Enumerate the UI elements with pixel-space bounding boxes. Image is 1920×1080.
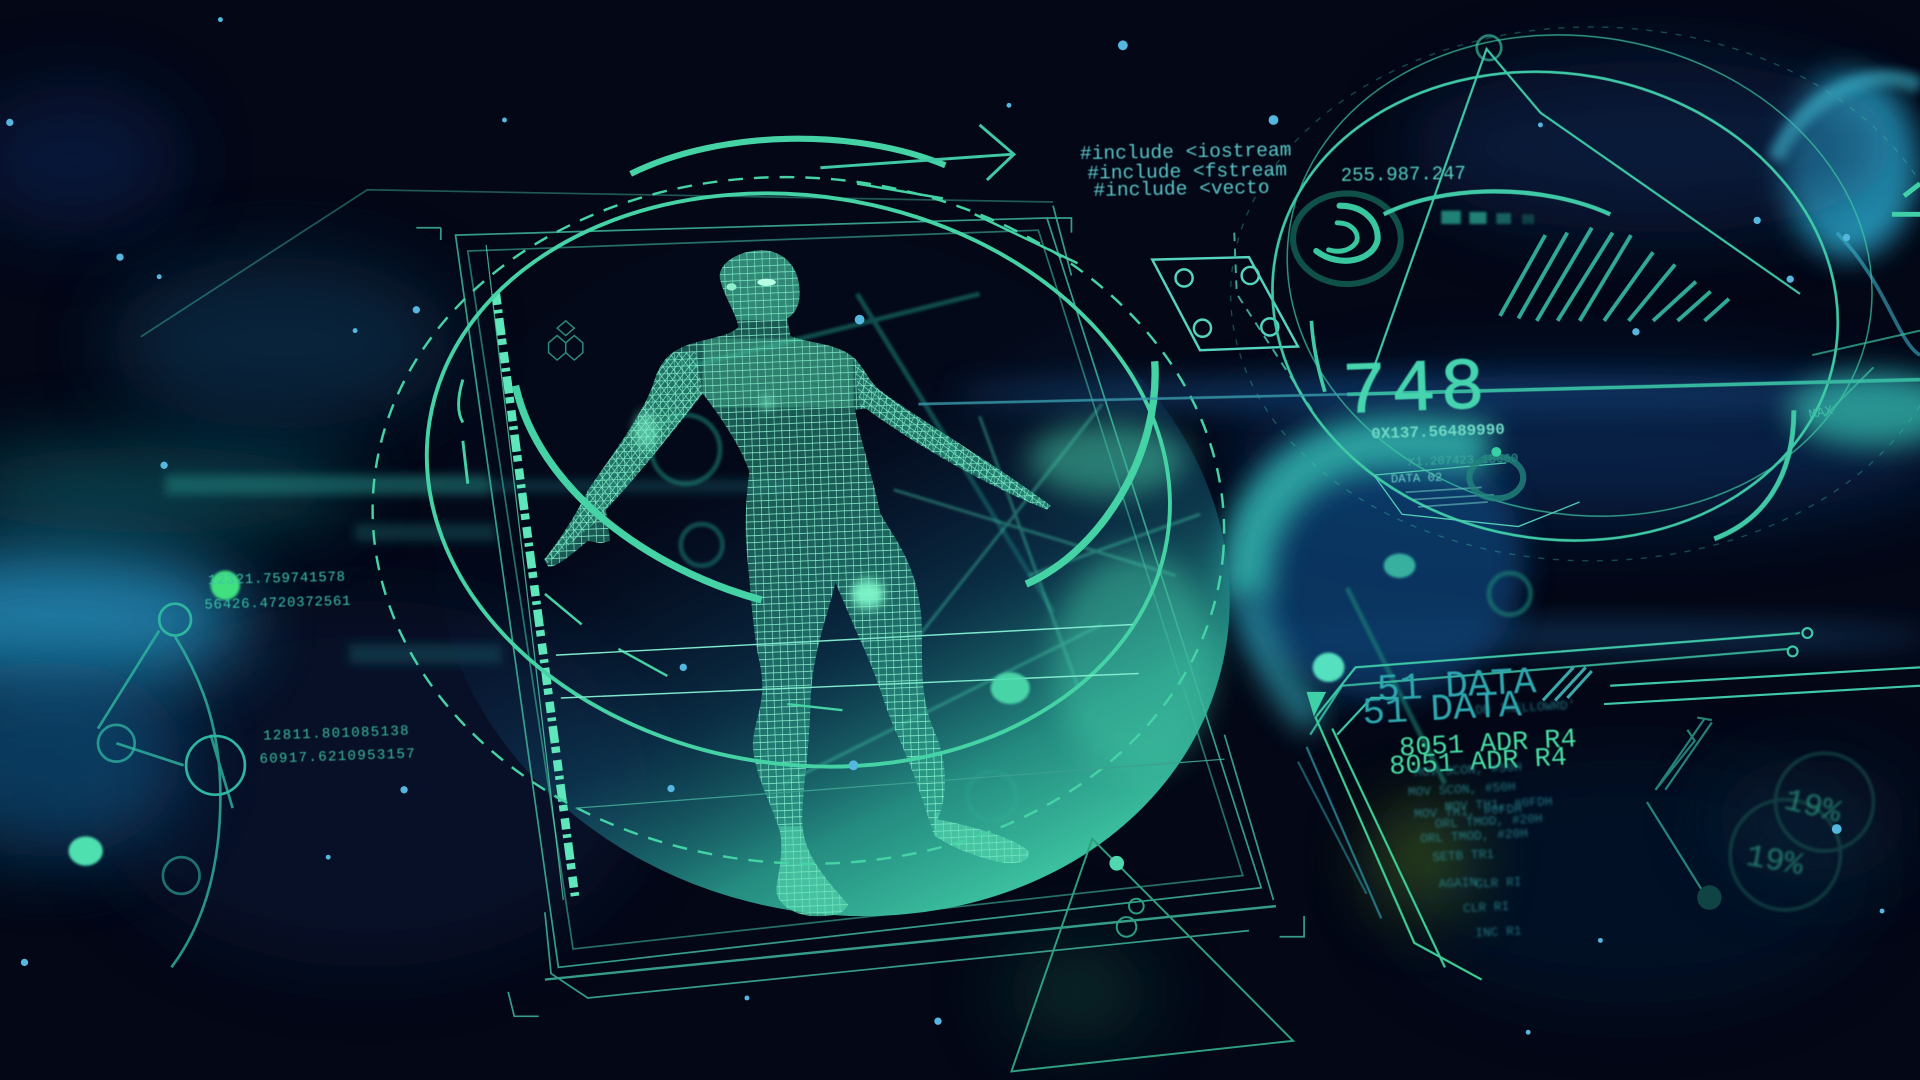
console code: CLR RI <box>1463 899 1510 916</box>
swirl on far right <box>1776 78 1920 416</box>
left numeric text upper: 12321.759741578 <box>208 569 346 589</box>
data readout panel: X1.207423.18660 <box>1408 451 1518 469</box>
left vertical data strip <box>486 245 576 900</box>
left numeric text lower: 60917.6210953157 <box>259 746 416 768</box>
data readout panel <box>1371 421 1580 527</box>
console code: ORL TMOD, #20H <box>1435 811 1543 832</box>
left numeric text lower <box>259 723 416 768</box>
big number: 748 <box>1341 348 1491 436</box>
blurred second globe <box>1231 429 1524 722</box>
dim horizontal haze bars <box>165 475 796 664</box>
code text: #include <fstream <box>1087 159 1287 185</box>
warning triangle <box>1307 692 1326 716</box>
dashed vertical <box>1234 233 1316 416</box>
left numeric text lower: 12811.801085138 <box>263 723 410 745</box>
top arrow <box>820 125 1014 180</box>
left network diagram <box>98 604 245 967</box>
console code: SETB TR1 <box>1432 847 1495 865</box>
zigzag arrow <box>1647 718 1722 910</box>
console code: DB 'HELLOWRD' <box>1475 698 1576 718</box>
background circuit haze <box>651 294 1531 820</box>
right radar rings <box>918 0 1920 585</box>
console code: CLR RI <box>1475 874 1522 892</box>
console address lines: 8051 ADR R4 <box>1389 744 1568 783</box>
left numeric text upper: 56426.4720372561 <box>204 594 352 614</box>
right-edge label: MAX <box>1808 404 1835 424</box>
console code: MOV SCON, #50H <box>1414 760 1522 780</box>
progress dashes <box>1441 211 1534 224</box>
dome hemisphere <box>362 147 1303 999</box>
console code: MOV TH1, #0FDH <box>1414 801 1522 822</box>
lower-right console <box>1298 628 1920 980</box>
code text: #include <vecto <box>1093 177 1270 202</box>
swirl icon <box>1293 193 1401 284</box>
console headings: 51 DATA <box>1361 684 1523 736</box>
bottom triangle with nodes <box>1011 839 1293 1071</box>
console code: AGAIN: <box>1438 874 1485 892</box>
glowing nodes <box>69 553 1416 866</box>
console code <box>1408 698 1576 941</box>
console code: MOV TH1, #0FDH <box>1444 794 1553 815</box>
ip number: 255.987.247 <box>1341 163 1466 187</box>
percent gauges: 19% <box>1743 839 1807 884</box>
four-hole plate <box>1152 257 1298 350</box>
figure glow spots <box>633 396 885 609</box>
console frame lines <box>1298 628 1920 980</box>
console address lines: 8051 ADR R4 <box>1398 725 1578 764</box>
hatch marks <box>1543 667 1592 700</box>
percent gauges <box>1730 753 1873 910</box>
hatch pattern <box>1500 228 1729 321</box>
hexagon molecule icon <box>549 321 583 360</box>
left numeric text upper <box>204 569 352 614</box>
console headings: 51 DATA <box>1376 661 1538 712</box>
data readout panel: 0X137.56489990 <box>1371 421 1505 443</box>
console code: ORL TMOD, #20H <box>1420 826 1528 846</box>
dome network lines <box>784 404 1200 784</box>
human wireframe figure <box>544 250 1050 916</box>
code text: #include <iostream <box>1080 139 1292 165</box>
code text <box>1080 139 1292 202</box>
console address lines <box>1389 725 1578 783</box>
percent gauges: 19% <box>1780 783 1846 832</box>
console code: INC R1 <box>1475 923 1522 941</box>
dome inner glows <box>1029 422 1212 771</box>
console headings <box>1361 661 1538 736</box>
data readout panel: DATA 02 <box>1391 471 1443 486</box>
main rings <box>349 139 1247 892</box>
console code: MOV SCON, #50H <box>1408 779 1516 800</box>
hud frame <box>141 190 1304 1016</box>
